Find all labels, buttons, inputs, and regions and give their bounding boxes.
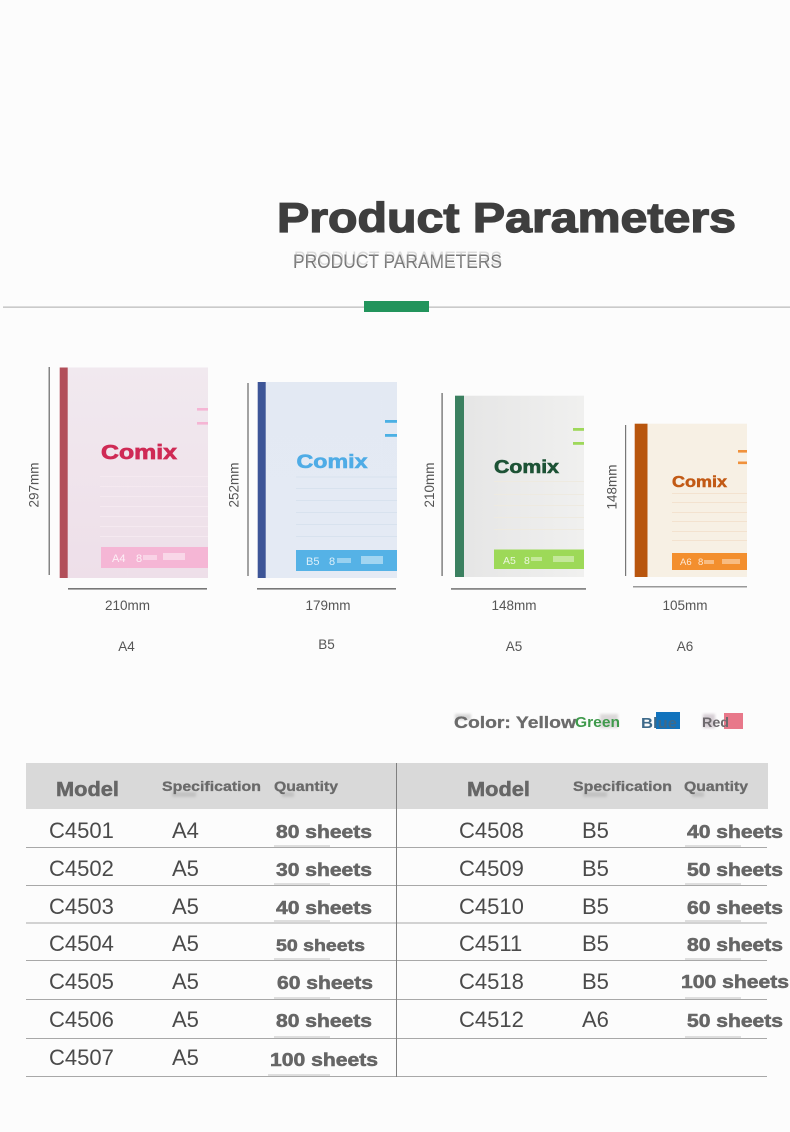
A6 label: A6 xyxy=(677,639,693,654)
row C4512: C4512 xyxy=(459,1007,524,1032)
row C4501: A4 xyxy=(172,818,199,843)
row C4503: C4503 xyxy=(49,894,114,919)
row C4511 xyxy=(459,931,783,956)
A6 width dimension: 105mm xyxy=(662,598,708,613)
row C4512: A6 xyxy=(582,1007,609,1032)
header divider with green accent xyxy=(3,301,790,312)
notebook: B5 xyxy=(226,382,397,652)
row C4502: A5 xyxy=(172,856,199,881)
B5 height dimension: 252mm xyxy=(226,462,242,508)
A4 width dimension xyxy=(68,588,207,613)
row C4504 xyxy=(49,931,365,956)
left column headers: Specification xyxy=(162,778,261,794)
right column headers: Model xyxy=(467,779,530,801)
row C4503: A5 xyxy=(172,894,199,919)
color legend xyxy=(454,712,743,732)
subtitle: PRODUCT PARAMETERS xyxy=(294,249,502,270)
B5 cover: 8 xyxy=(329,556,335,568)
row C4518: B5 xyxy=(582,969,609,994)
row C4509: 50 sheets xyxy=(687,860,783,880)
row C4511: 80 sheets xyxy=(687,935,783,955)
A4 cover: Comix xyxy=(101,442,177,464)
subtitle: PRODUCT PARAMETERS xyxy=(293,252,502,273)
A6 cover xyxy=(635,424,747,577)
left column headers: Model xyxy=(56,779,119,801)
A6 width dimension xyxy=(633,586,747,613)
label: red: Red xyxy=(702,714,729,730)
row C4502: 30 sheets xyxy=(276,860,372,880)
parameter table xyxy=(26,763,789,1077)
left column headers xyxy=(56,778,338,801)
A6 cover: Comix xyxy=(672,474,727,491)
row C4518: C4518 xyxy=(459,969,524,994)
row C4512 xyxy=(459,1007,783,1032)
row C4504: A5 xyxy=(172,931,199,956)
row C4509: C4509 xyxy=(459,856,524,881)
row C4502: C4502 xyxy=(49,856,114,881)
left column headers: Quantity xyxy=(274,778,338,794)
row C4512: 50 sheets xyxy=(687,1011,783,1031)
A4 cover: 8 xyxy=(136,553,142,565)
row C4510 xyxy=(459,894,783,919)
right column headers: Specification xyxy=(573,778,672,794)
A5 width dimension: 148mm xyxy=(491,598,537,613)
B5 cover: Comix xyxy=(296,452,368,473)
row C4505: 60 sheets xyxy=(277,973,373,993)
A4 height dimension: 297mm xyxy=(26,462,42,508)
swatch: blue xyxy=(656,712,680,729)
row C4508: C4508 xyxy=(459,818,524,843)
row C4507: C4507 xyxy=(49,1045,114,1070)
swatch: red xyxy=(724,713,743,729)
label: green: Green xyxy=(575,715,620,731)
table header band xyxy=(26,763,768,809)
row C4501 xyxy=(49,818,372,843)
row C4505: A5 xyxy=(172,969,199,994)
row C4509 xyxy=(459,856,783,881)
A5 cover: 8 xyxy=(524,555,530,567)
quantity cell smudges xyxy=(268,845,741,1076)
notebook: A6 xyxy=(604,424,747,654)
A4 label: A4 xyxy=(118,639,135,654)
row C4508 xyxy=(459,818,783,843)
A4 width dimension: 210mm xyxy=(105,598,150,613)
A5 width dimension xyxy=(451,588,586,613)
row C4501: C4501 xyxy=(49,818,114,843)
A5 label: A5 xyxy=(506,639,522,654)
right column headers xyxy=(467,778,748,801)
A5 height dimension: 210mm xyxy=(422,462,437,508)
A5 cover: Comix xyxy=(494,457,559,477)
A4 cover xyxy=(60,368,208,578)
B5 label: B5 xyxy=(318,637,335,652)
row C4506: A5 xyxy=(172,1007,199,1032)
row C4507: 100 sheets xyxy=(270,1050,378,1070)
row C4506 xyxy=(49,1007,372,1032)
title: Product Parameters xyxy=(277,194,736,241)
row C4510: C4510 xyxy=(459,894,524,919)
row C4501: 80 sheets xyxy=(276,822,372,842)
row C4510: B5 xyxy=(582,894,609,919)
row C4505: C4505 xyxy=(49,969,114,994)
notebook: A5 xyxy=(422,393,586,654)
row C4508: B5 xyxy=(582,818,609,843)
notebook: A4 xyxy=(26,367,208,654)
label: blue: Blue xyxy=(641,715,677,732)
row C4508: 40 sheets xyxy=(687,822,783,842)
color smudges xyxy=(455,714,715,728)
B5 width dimension xyxy=(257,588,396,613)
A5 cover: A5 xyxy=(503,555,516,567)
row C4506: 80 sheets xyxy=(276,1011,372,1031)
row C4504: 50 sheets xyxy=(276,936,365,955)
right column headers: Quantity xyxy=(684,778,748,794)
row C4510: 60 sheets xyxy=(687,898,783,918)
table rules xyxy=(26,763,767,1077)
row C4511: B5 xyxy=(582,931,609,956)
A6 cover: A6 xyxy=(680,557,692,568)
B5 width dimension: 179mm xyxy=(305,598,351,613)
row C4518: 100 sheets xyxy=(681,972,789,992)
row C4505 xyxy=(49,969,373,994)
row C4518 xyxy=(459,969,789,994)
row C4503: 40 sheets xyxy=(276,898,372,918)
A6 cover: 8 xyxy=(698,557,703,568)
row C4504: C4504 xyxy=(49,931,114,956)
row C4503 xyxy=(49,894,372,919)
header smudges xyxy=(172,792,704,797)
A6 height dimension: 148mm xyxy=(604,464,620,510)
A4 cover: A4 xyxy=(112,553,125,565)
row C4511: C4511 xyxy=(459,931,522,956)
row C4507 xyxy=(49,1045,378,1070)
B5 cover: B5 xyxy=(306,556,319,568)
A5 cover xyxy=(455,396,584,577)
label: color yellow: Color: Yellow xyxy=(454,713,577,732)
row C4502 xyxy=(49,856,372,881)
row C4509: B5 xyxy=(582,856,609,881)
row C4507: A5 xyxy=(172,1045,199,1070)
B5 cover xyxy=(258,382,397,578)
row C4506: C4506 xyxy=(49,1007,114,1032)
